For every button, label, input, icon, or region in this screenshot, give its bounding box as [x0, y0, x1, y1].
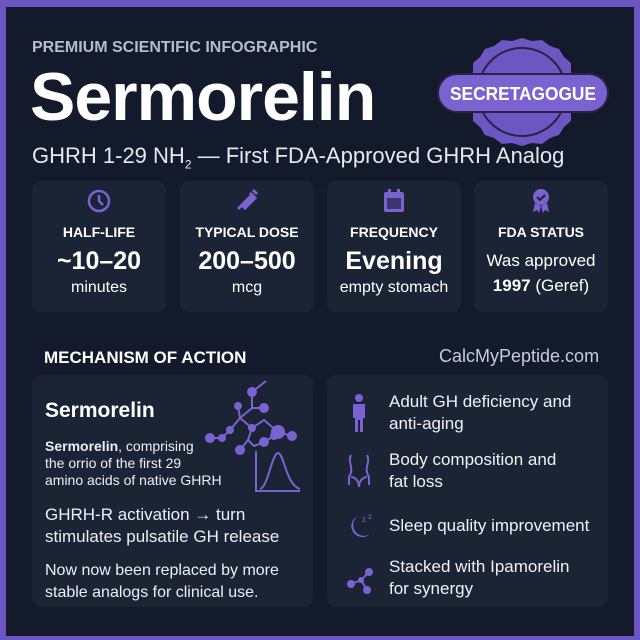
title: Sermorelin [30, 59, 375, 135]
text block: definition: the orrio of the first 29 [45, 455, 181, 471]
badge: secretagogue [437, 38, 609, 146]
use: GH deficiency: Adult GH deficiency and [389, 392, 571, 411]
use: stacked: Stacked with Ipamorelin [389, 557, 569, 576]
panel heading: Sermorelin [45, 399, 155, 422]
text block: activation [45, 505, 279, 546]
use: GH deficiency: anti-aging [389, 414, 464, 433]
text block: activation: stimulates pulsatile GH release [45, 527, 279, 546]
badge: secretagogue: SECRETAGOGUE [450, 84, 596, 104]
tile: half-life: ~10–20 [57, 247, 141, 275]
tile: typical dose [180, 181, 314, 312]
use: sleep: Sleep quality improvement [389, 516, 589, 535]
panel: uses [327, 375, 608, 607]
use: body composition: Body composition and [389, 450, 556, 469]
use: stacked: for synergy [389, 579, 473, 598]
use: GH deficiency [353, 392, 571, 433]
text block: activation: GHRH-R activation → turn [45, 505, 245, 524]
subtitle: GHRH 1-29 NH2 — First FDA-Approved GHRH Analog [32, 143, 564, 171]
tile: fda status: Was approved [486, 251, 595, 270]
text block: definition: amino acids of native GHRH [45, 472, 222, 488]
tile: half-life: HALF-LIFE [63, 224, 135, 240]
icon: molecule [205, 380, 297, 455]
tile: fda status: FDA STATUS [498, 224, 584, 240]
use: body composition [348, 450, 556, 491]
text block: definition [45, 438, 222, 488]
tile: frequency: FREQUENCY [350, 224, 438, 240]
panel: mechanism [32, 375, 313, 607]
text block: definition: Sermorelin, comprising [45, 438, 194, 454]
tile: fda status [474, 181, 608, 312]
tile: typical dose: 200–500 [198, 247, 296, 275]
tile: fda status: 1997 (Geref) [493, 276, 589, 295]
tile: half-life: minutes [71, 279, 127, 296]
text block: replaced: stable analogs for clinical use. [45, 584, 258, 601]
tile: frequency: Evening [345, 247, 443, 275]
text block: replaced: Now now been replaced by more [45, 562, 279, 579]
use: stacked [347, 557, 569, 598]
icon: pulse chart [255, 451, 300, 492]
text block: replaced [45, 562, 279, 601]
use: sleep: z [362, 515, 366, 524]
use: sleep: z [368, 512, 372, 521]
use: body composition: fat loss [389, 472, 443, 491]
use: sleep [351, 512, 590, 538]
heading: mechanism of action: MECHANISM OF ACTION [44, 348, 246, 367]
tile: typical dose: TYPICAL DOSE [195, 224, 299, 240]
tile: frequency: empty stomach [340, 279, 448, 296]
website: CalcMyPeptide.com [439, 346, 599, 366]
kicker: PREMIUM SCIENTIFIC INFOGRAPHIC [32, 39, 317, 56]
tile: typical dose: mcg [232, 279, 262, 296]
tile: half-life [32, 181, 166, 312]
tile: frequency [327, 181, 461, 312]
